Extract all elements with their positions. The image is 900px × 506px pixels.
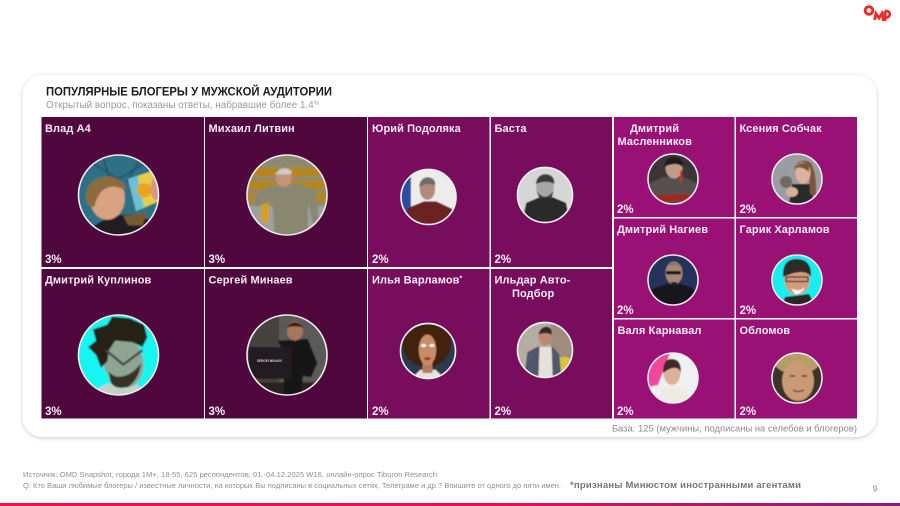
cell: Гарик Харламов: 2% xyxy=(740,305,756,317)
heading: ПОПУЛЯРНЫЕ БЛОГЕРЫ У МУЖСКОЙ АУДИТОРИИ xyxy=(46,84,332,98)
cell: Влад А4: 3% xyxy=(45,254,62,266)
treemap xyxy=(42,117,857,418)
cell: Юрий Подоляка: Юрий Подоляка xyxy=(372,123,462,135)
cell: Баста: Баста xyxy=(494,123,527,135)
page number: 9 xyxy=(873,484,878,494)
cell: Валя Карнавал: Валя Карнавал xyxy=(618,325,702,337)
subtitle: Открытый вопрос, показаны ответы, набравшие более 1.4 xyxy=(46,100,318,111)
base note: База: 125 (мужчины, подписаны на селебов и блогеров) xyxy=(612,424,857,434)
cell: Михаил Литвин: 3% xyxy=(208,254,225,266)
cell: Влад А4: Влад А4 xyxy=(45,123,92,135)
avatar: Юрий Подоляка xyxy=(401,170,456,224)
cell: Илья Варламов xyxy=(368,269,490,418)
avatar: Михаил Литвин xyxy=(247,155,327,235)
footer gradient bar xyxy=(0,503,900,506)
cell: Обломов xyxy=(736,320,857,418)
cell: Сергей Минаев: Сергей Минаев xyxy=(208,274,293,286)
cell: Дмитрий Масленников xyxy=(614,117,734,217)
avatar: Дмитрий Масленников xyxy=(648,154,698,204)
cell: Баста xyxy=(491,117,612,267)
cell: Гарик Харламов xyxy=(736,218,857,318)
panel: main white card xyxy=(22,75,876,437)
cell: Сергей Минаев: 3% xyxy=(208,406,225,418)
cell: Обломов: 2% xyxy=(740,406,756,418)
cell: Ильдар Авто-Подбор: Ильдар Авто- xyxy=(494,274,571,286)
cell: Сергей Минаев xyxy=(205,269,367,418)
cell: Дмитрий Куплинов: 3% xyxy=(45,406,62,418)
cell: Юрий Подоляка: 2% xyxy=(372,254,389,266)
logo: OMD xyxy=(865,7,890,21)
avatar: Дмитрий Нагиев xyxy=(648,255,698,305)
avatar: Дмитрий Куплинов xyxy=(78,315,158,405)
cell: Ксения Собчак: Ксения Собчак xyxy=(740,123,822,135)
cell: Ксения Собчак: 2% xyxy=(740,204,756,216)
cell: Дмитрий Куплинов: Дмитрий Куплинов xyxy=(45,274,152,286)
cell: Обломов: Обломов xyxy=(740,325,790,337)
cell: Ильдар Авто-Подбор: Подбор xyxy=(512,288,554,300)
avatar: Гарик Харламов xyxy=(772,255,822,305)
cell: Дмитрий Куплинов xyxy=(42,269,204,418)
avatar: Сергей Минаев: SERGEI MINAEV xyxy=(257,359,283,363)
cell: Илья Варламов: 2% xyxy=(372,406,389,418)
cell: Дмитрий Нагиев xyxy=(614,218,734,318)
cell: Дмитрий Масленников: Масленников xyxy=(618,136,692,148)
cell: Юрий Подоляка xyxy=(368,117,490,267)
footnote: source: Источник: OMD Snapshot, города 1М+, 18-55, 625 респондентов, 01.-04.12.2025 W16, онлайн-опрос Tiburon Research xyxy=(23,470,437,479)
cell: Ксения Собчак xyxy=(736,117,857,217)
avatar: Баста xyxy=(518,168,572,222)
cell: Дмитрий Нагиев: 2% xyxy=(617,305,634,317)
avatar: Валя Карнавал xyxy=(648,353,698,403)
cell: Валя Карнавал: 2% xyxy=(617,406,634,418)
cell: Гарик Харламов: Гарик Харламов xyxy=(740,224,830,236)
cell: Ильдар Авто-Подбор xyxy=(491,269,612,418)
avatar: Сергей Минаев xyxy=(247,315,327,395)
cell: Дмитрий Масленников: 2% xyxy=(617,204,634,216)
footnote: question: Q: Кто Ваши любимые блогеры / известные личности, на которых Вы подписаны в социальных сетях, Телеграме и др.? Впишите от одного до пяти имен. xyxy=(23,481,561,490)
cell: Михаил Литвин xyxy=(205,117,367,267)
subtitle: % xyxy=(314,101,320,107)
avatar: Влад А4 xyxy=(78,155,160,235)
avatar: Ксения Собчак xyxy=(772,154,822,204)
cell: Дмитрий Нагиев: Дмитрий Нагиев xyxy=(617,224,708,236)
cell: Михаил Литвин: Михаил Литвин xyxy=(208,123,295,135)
cell: Баста: 2% xyxy=(494,254,511,266)
footnote: foreign agents: *признаны Минюстом иностранными агентами xyxy=(570,480,801,491)
avatar: Ильдар Авто-Подбор xyxy=(518,322,572,378)
cell: Илья Варламов: Илья Варламов xyxy=(372,274,460,286)
cell: Валя Карнавал xyxy=(614,320,734,418)
cell: Илья Варламов: * xyxy=(460,276,463,282)
cell: Влад А4 xyxy=(42,117,204,267)
cell: Ильдар Авто-Подбор: 2% xyxy=(494,406,511,418)
avatar: Илья Варламов xyxy=(400,319,456,378)
cell: Дмитрий Масленников: Дмитрий xyxy=(630,123,679,135)
avatar: Обломов xyxy=(772,352,822,403)
